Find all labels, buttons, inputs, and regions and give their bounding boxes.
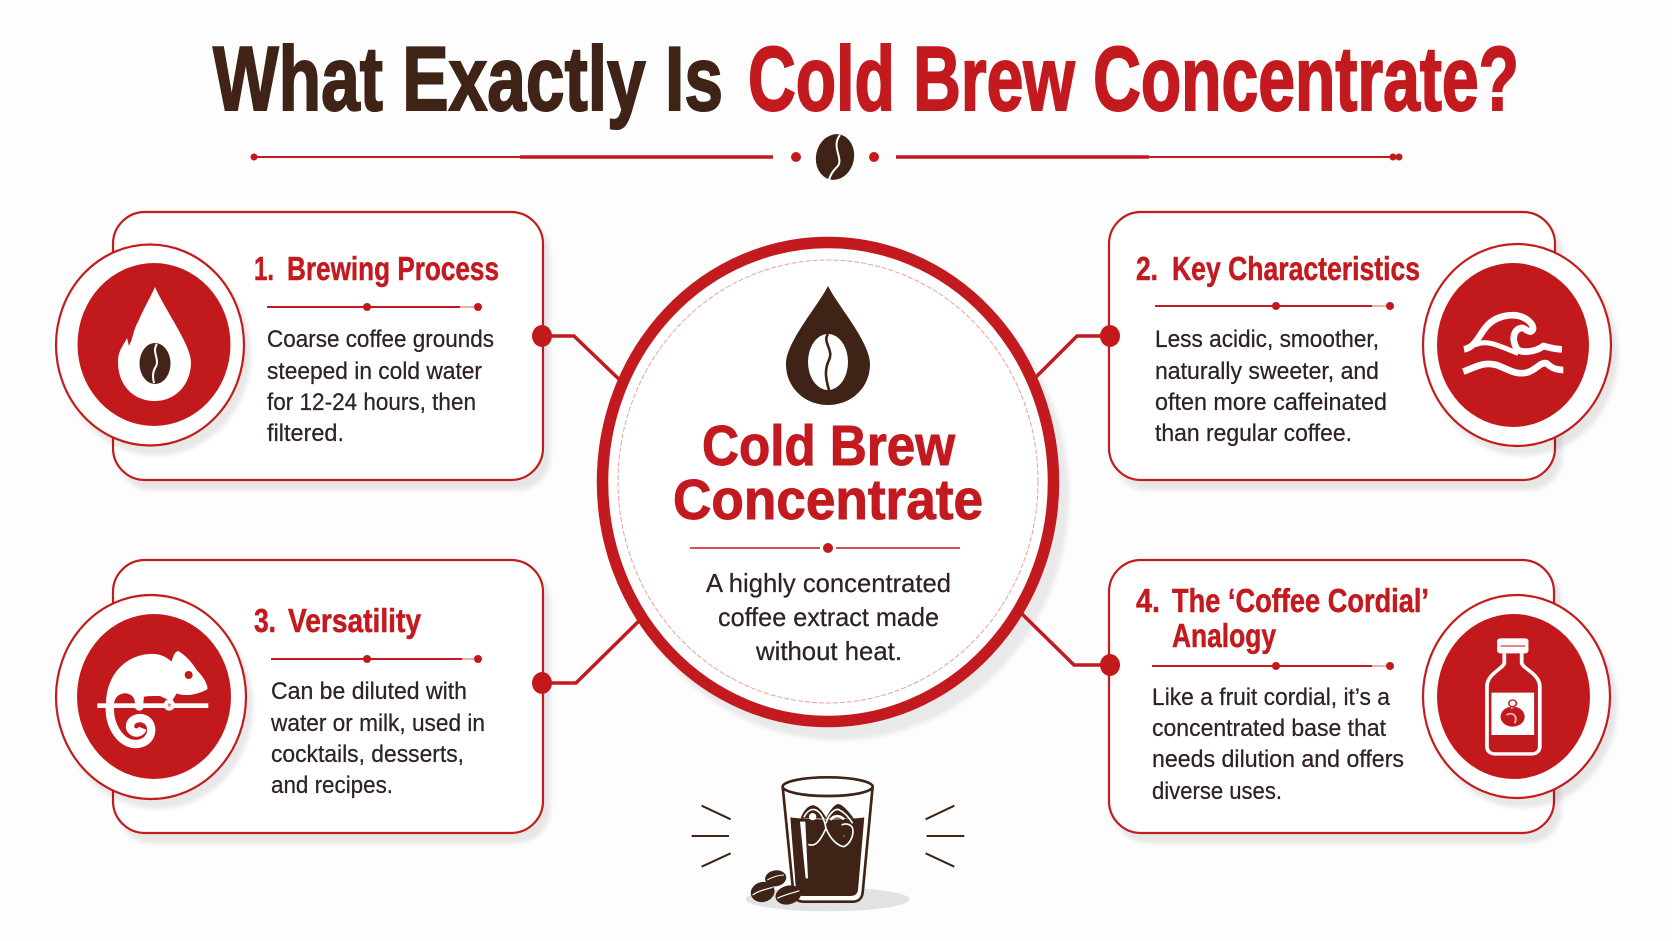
heading [1136,582,1429,654]
heading: Analogy [1172,617,1277,654]
panel: 1. Brewing Process [56,212,543,480]
heading: 4. [1136,582,1160,619]
body text: Like a fruit cordial, it’s a [1152,684,1391,711]
body text: steeped in cold water [267,358,482,385]
heading: Versatility [288,602,422,639]
heading: 3. [254,602,276,639]
body text: cocktails, desserts, [271,741,464,768]
heading: Cold Brew Concentrate [673,414,983,532]
icon: wave [1423,244,1611,446]
body text [270,678,485,799]
body text [267,326,494,447]
body text: filtered. [267,420,344,447]
body text: water or milk, used in [270,710,485,737]
panel: centre circle [602,242,1054,722]
heading: Key Characteristics [1172,250,1420,287]
body text: often more caffeinated [1155,389,1387,416]
title [213,29,1519,130]
icon: coffee drop [786,286,870,405]
icon: chameleon [56,595,246,799]
body text: concentrated base that [1152,715,1386,742]
body text: needs dilution and offers [1152,746,1404,773]
body text [1155,326,1387,447]
body text: diverse uses. [1152,778,1282,805]
centre description: A highly concentrated [706,568,951,598]
connector: card 2 to centre [1030,325,1120,383]
title: What Exactly Is [213,29,723,130]
centre description: without heat. [755,636,902,666]
heading: Cold Brew Concentrate: Concentrate [673,468,983,532]
body text [1152,684,1404,805]
body text: for 12-24 hours, then [267,389,476,416]
panel: 3. Versatility [56,560,543,833]
icon: drop with flame and bean [56,244,244,446]
heading: The ‘Coffee Cordial’ [1172,582,1429,619]
panel: 2. Key Characteristics [1109,212,1611,480]
panel: 4. The Coffee Cordial Analogy [1109,560,1610,833]
centre description [706,568,951,666]
centre description: coffee extract made [718,602,939,632]
icon: iced coffee glass with beans [692,777,964,911]
heading: Brewing Process [287,250,499,287]
title divider with coffee bean [250,131,1402,183]
connector: card 3 to centre [532,615,645,694]
connector: card 1 to centre [532,325,625,385]
body text: than regular coffee. [1155,420,1352,447]
heading: 2. [1136,250,1158,287]
heading: Cold Brew Concentrate: Cold Brew [702,414,956,478]
body text: and recipes. [271,772,393,799]
body text: Coarse coffee grounds [267,326,494,353]
body text: naturally sweeter, and [1155,358,1379,385]
icon: cordial bottle [1423,595,1610,798]
connector: card 4 to centre [1018,610,1120,676]
body text: Less acidic, smoother, [1155,326,1379,353]
heading: 1. [254,250,274,287]
body text: Can be diluted with [271,678,467,705]
